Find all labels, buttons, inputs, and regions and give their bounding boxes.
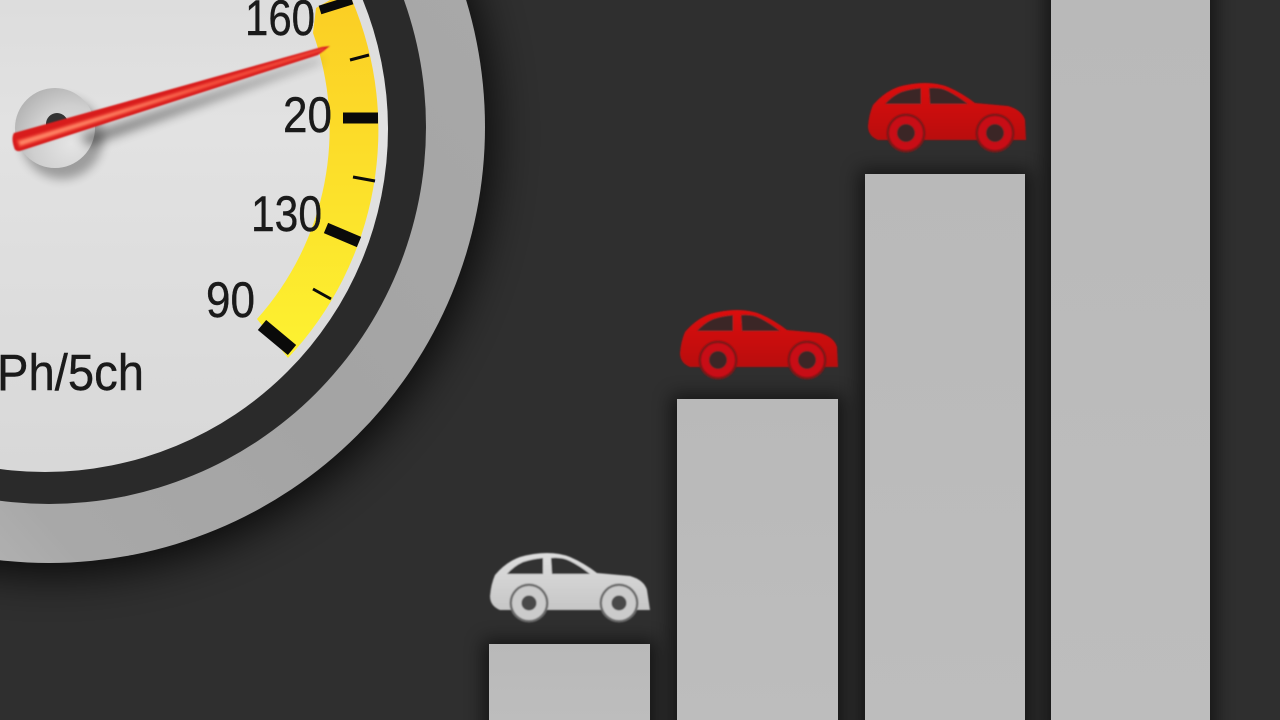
speed labels: 20 (283, 87, 332, 143)
speed labels: 130 (251, 186, 322, 242)
speed labels (206, 0, 332, 328)
gauge (0, 0, 492, 574)
gauge outer ring (0, 0, 485, 563)
yellow speed band (257, 0, 378, 358)
bar 3 (859, 170, 1031, 720)
gauge face (0, 0, 388, 472)
needle (12, 46, 330, 151)
unit label: Ph/5ch (0, 344, 144, 401)
car: red middle (680, 310, 838, 380)
needle hub (15, 88, 103, 179)
tick marks (262, 0, 378, 350)
car: red right (868, 83, 1026, 152)
bar 4 (1045, 0, 1216, 720)
gauge dark ring (0, 0, 426, 504)
bar 2 (671, 395, 844, 720)
speed labels: 90 (206, 272, 255, 328)
car: white (490, 553, 650, 622)
bar 1 (483, 640, 656, 720)
